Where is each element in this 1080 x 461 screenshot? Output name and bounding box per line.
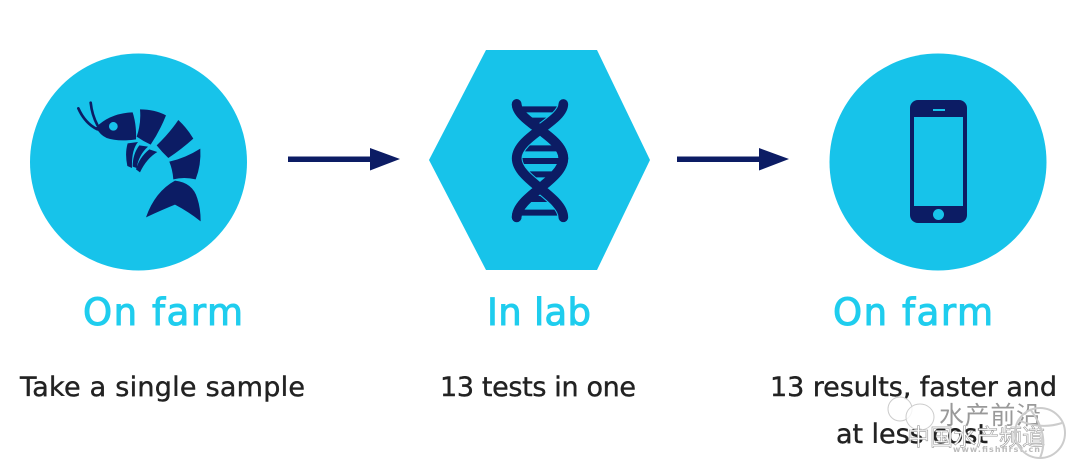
watermark <box>888 397 1065 458</box>
text: take a single sample: Take a single sample <box>19 372 305 403</box>
icon: chat bubbles <box>888 397 934 430</box>
arrow: step 1 to step 2 <box>288 148 400 170</box>
heading: in lab: In lab <box>487 291 591 334</box>
icon hexagon: step 2 <box>429 50 650 270</box>
text: at less cost: at less cost <box>836 419 988 450</box>
panel: step 1 on farm <box>30 54 247 270</box>
icon: DNA helix <box>517 104 563 217</box>
icon circle: step 1 <box>30 54 247 270</box>
arrow: step 2 to step 3 <box>677 148 789 170</box>
heading: on farm 2: On farm <box>833 291 993 334</box>
heading: on farm 1: On farm <box>83 291 243 334</box>
icon: smartphone <box>910 100 967 223</box>
icon: globe <box>1015 408 1065 458</box>
icon circle: step 3 <box>830 54 1046 270</box>
watermark url: www.fishfirst.cn <box>953 445 1040 454</box>
watermark name: 水产前沿 <box>939 401 1041 430</box>
icon: shrimp <box>78 103 201 221</box>
text: 13 results faster and: 13 results, faster and <box>770 372 1057 403</box>
text: 13 tests in one: 13 tests in one <box>440 372 636 403</box>
panel: step 3 on farm <box>830 54 1046 270</box>
watermark channel: 中国水产频道 <box>907 425 1045 451</box>
panel: step 2 in lab <box>429 50 650 270</box>
